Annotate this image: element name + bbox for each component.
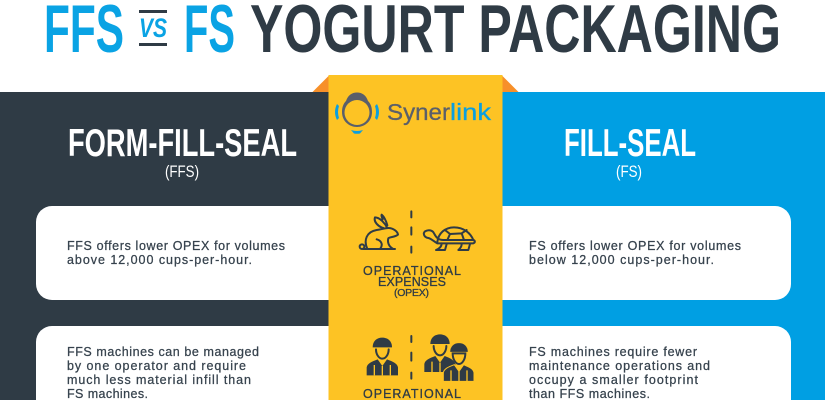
title: VS: [139, 13, 167, 43]
card: FFS OPEX: above 12,000 cups-per-hour.: [67, 253, 252, 267]
card: FFS operators: FFS machines can be managed: [67, 345, 259, 359]
panel: fill-seal: [502, 92, 825, 400]
panel: center column: [312, 75, 518, 400]
card: FS maintenance: [502, 326, 791, 400]
heading: form-fill-seal: (FFS): [165, 162, 199, 181]
heading: fill-seal: [564, 122, 696, 181]
card: FS maintenance: occupy a smaller footprint: [529, 373, 699, 387]
label: operational expenses: [363, 264, 461, 299]
card: FS OPEX: below 12,000 cups-per-hour.: [529, 253, 714, 267]
card: FFS operators: [36, 326, 330, 400]
label: operational expenses: (OPEX): [394, 287, 429, 299]
heading: fill-seal: FILL-SEAL: [564, 122, 696, 165]
panel: form-fill-seal: [0, 92, 330, 400]
heading: form-fill-seal: [68, 122, 297, 181]
heading: fill-seal: (FS): [616, 162, 642, 181]
card: FFS OPEX: [36, 206, 330, 300]
logo: Synerlink: link: [450, 99, 492, 125]
icon: rabbit versus turtle: [360, 211, 475, 253]
logo: Synerlink: Syner: [387, 99, 450, 125]
label: operational expenses: EXPENSES: [378, 275, 446, 289]
card: FS maintenance: maintenance operations and: [529, 359, 710, 373]
logo: Synerlink: [335, 92, 492, 134]
label: operational expenses: OPERATIONAL: [363, 264, 461, 278]
heading: form-fill-seal: FORM-FILL-SEAL: [68, 122, 297, 165]
card: FS OPEX: [502, 206, 791, 300]
card: FFS operators: much less material infill than: [67, 373, 251, 387]
card: FS maintenance: FS machines require fewer: [529, 345, 697, 359]
card: FFS operators: by one operator and require: [67, 359, 246, 373]
icon: one operator versus two operators: [367, 334, 474, 381]
card: FS OPEX: FS offers lower OPEX for volumes: [529, 239, 741, 253]
title: [44, 0, 781, 67]
card: FFS OPEX: FFS offers lower OPEX for volumes: [67, 239, 285, 253]
